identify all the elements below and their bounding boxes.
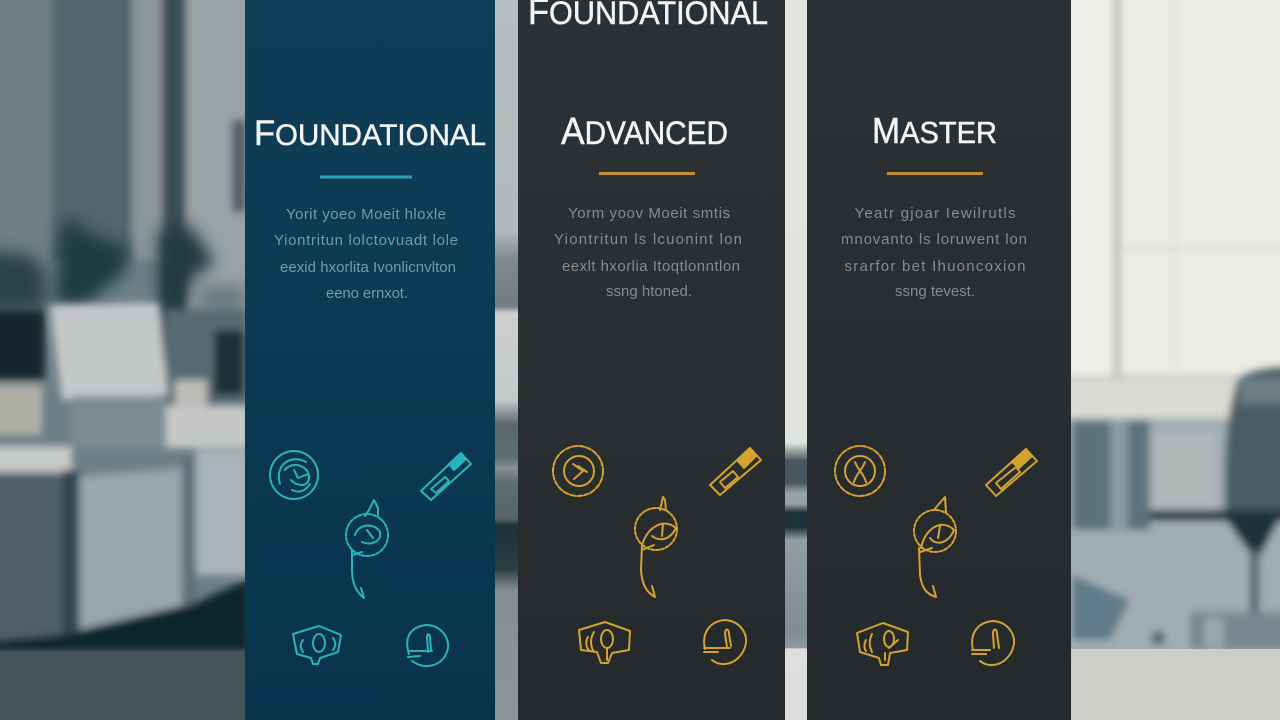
icon: amber flower with stem — [635, 497, 677, 597]
icon: teal swirl medallion — [270, 451, 318, 499]
icon: amber clock — [704, 620, 746, 664]
icon: amber speech hexagon — [857, 623, 908, 665]
heading: master: MASTER — [872, 110, 997, 151]
text block: foundational description: eeno ernxot. — [326, 285, 408, 302]
icon: amber flower with stem — [914, 497, 956, 597]
text block: foundational description: Yorit yoeo Moeit hloxle — [286, 206, 446, 223]
icon: teal clock — [407, 625, 448, 666]
text block: master description: Yeatr gjoar Iewilrutls — [854, 205, 1016, 222]
icon: teal tag — [421, 453, 471, 500]
text block: foundational description — [274, 206, 458, 302]
blurred office background, left — [0, 0, 250, 720]
text block: advanced description: Yorm yoov Moeit smtis — [568, 205, 730, 222]
text block: advanced description — [554, 205, 742, 300]
panel: advanced — [518, 0, 785, 720]
icon: amber cross medallion — [835, 446, 885, 496]
text block: advanced description: eexlt hxorlia Itoqtlonntlon — [562, 258, 740, 275]
icon: amber tag — [710, 448, 761, 495]
blurred office background, right — [1060, 0, 1280, 720]
text block: master description: mnovanto ls loruwent lon — [841, 231, 1027, 248]
heading: foundational: FOUNDATIONAL — [254, 114, 486, 153]
text block: foundational description: eexid hxorlita Ivonlicnvlton — [280, 259, 456, 276]
icon: amber speech hexagon — [579, 622, 630, 663]
panel: foundational — [245, 0, 495, 720]
silver gap between first and second panel — [495, 0, 518, 720]
divider: amber — [887, 172, 983, 175]
text block: master description — [841, 205, 1027, 300]
text block: advanced description: ssng htoned. — [606, 283, 692, 300]
silver gap between second and third panel — [785, 0, 807, 720]
divider: teal — [320, 176, 412, 178]
text block: advanced description: Yiontritun ls lcuonint lon — [554, 231, 742, 248]
icon: amber clock — [972, 621, 1014, 665]
icon: teal flower with stem — [346, 500, 388, 598]
text block: foundational description: Yiontritun lolctovuadt lole — [274, 232, 458, 249]
icon: teal speech hexagon — [293, 626, 341, 664]
panel: master — [807, 0, 1071, 720]
text block: master description: ssng tevest. — [895, 283, 975, 300]
icon: amber tag — [986, 449, 1037, 496]
text block: master description: srarfor bet Ihuoncoxion — [844, 258, 1026, 275]
divider: amber — [599, 172, 695, 175]
icon: amber ring medallion — [553, 446, 603, 496]
heading: advanced: ADVANCED — [561, 111, 728, 153]
